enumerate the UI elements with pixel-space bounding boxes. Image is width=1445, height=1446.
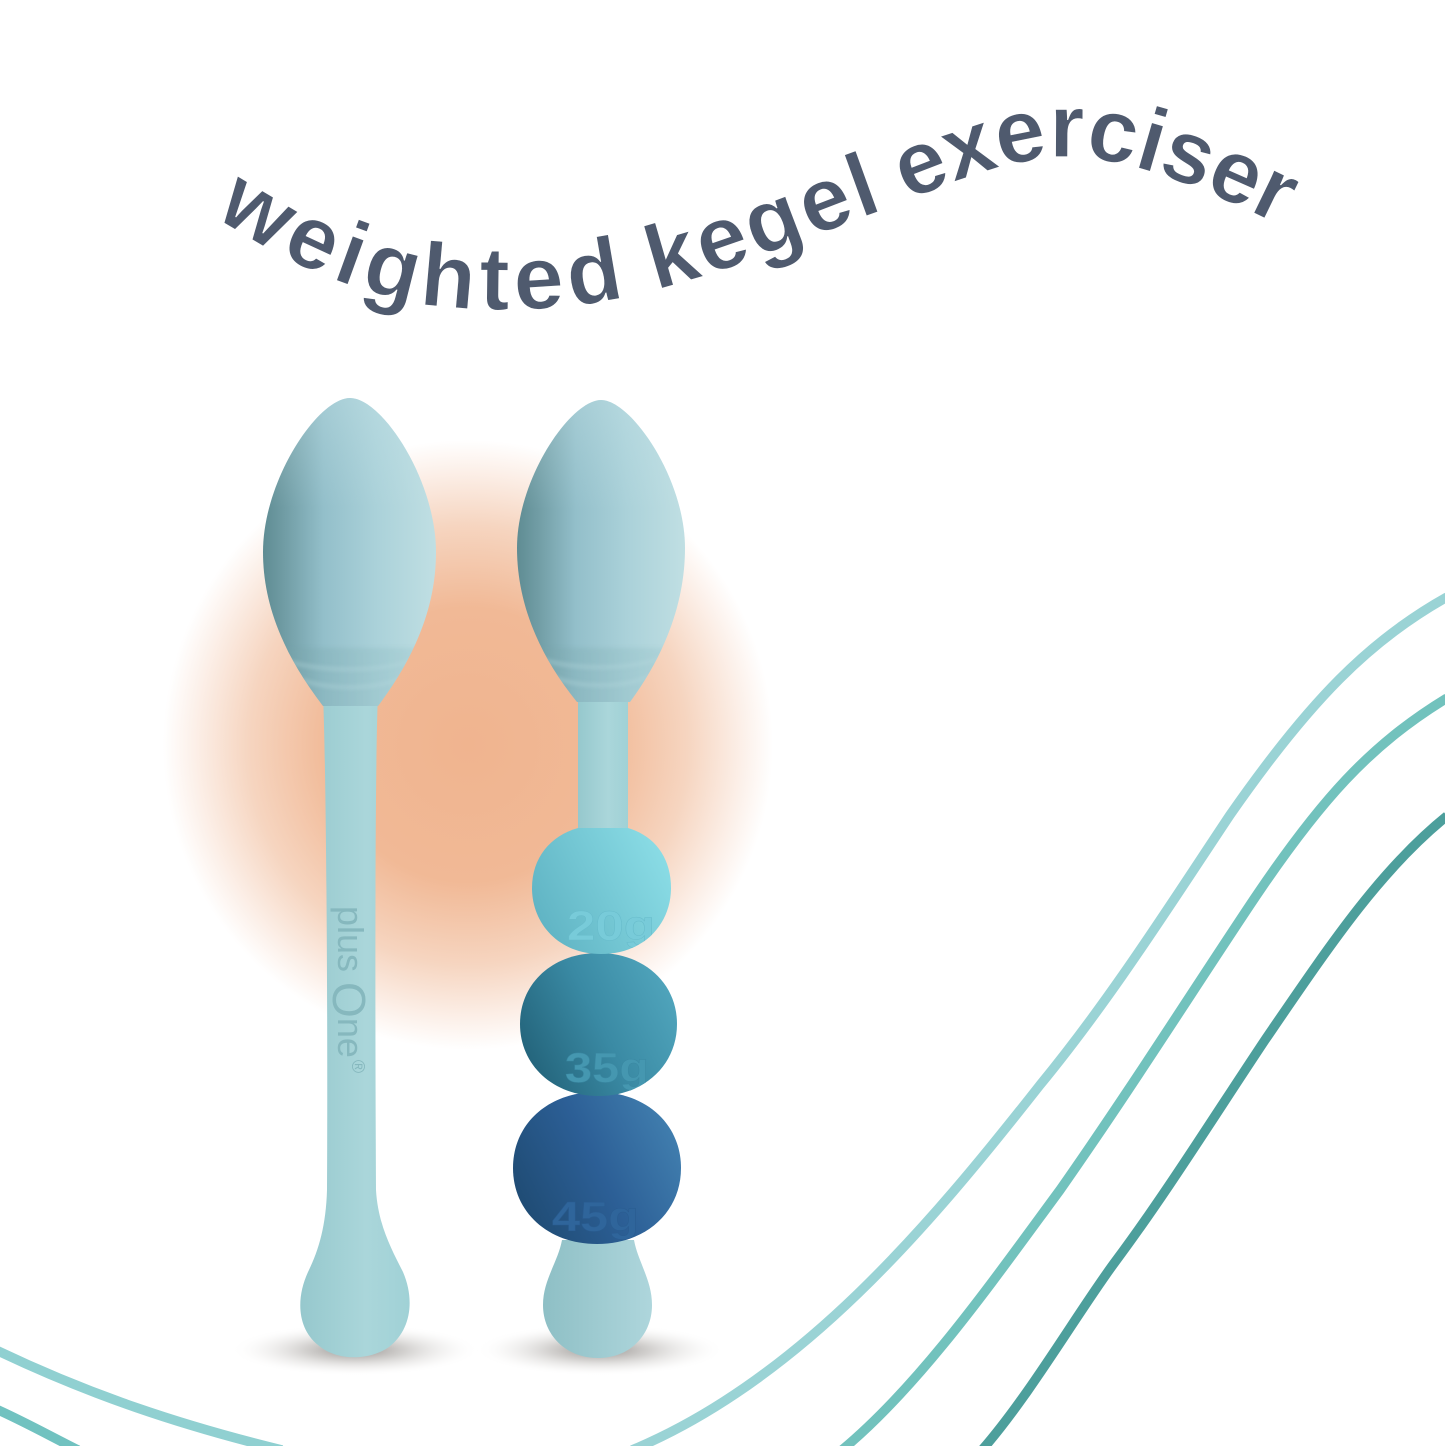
arc: bottom left medium	[0, 1409, 78, 1446]
right wand head	[517, 400, 685, 702]
right head shading and collar ribs	[532, 400, 662, 702]
title: weighted kegel exerciser	[224, 106, 1298, 316]
decorative wave lines right	[0, 597, 1445, 1446]
wand stem and bulb	[300, 695, 410, 1357]
shadow: left wand	[230, 1324, 480, 1376]
embossed logo: ®	[348, 1060, 368, 1073]
product: right wand with weights	[513, 400, 687, 1358]
embossed logo: O	[323, 982, 375, 1018]
weight: 35g: 35g	[565, 1044, 649, 1091]
arc: bottom left light	[0, 1350, 282, 1446]
product: left wand	[263, 398, 438, 1357]
weight: 20g	[532, 828, 671, 954]
wave: medium teal	[842, 698, 1445, 1446]
embossed logo: plus	[330, 906, 371, 972]
weight: 45g	[513, 1092, 681, 1244]
weight: 20g: 20g	[567, 902, 655, 949]
shadow: right wand	[475, 1324, 725, 1376]
right wand stem	[578, 695, 628, 835]
embossed logo: ne	[330, 1018, 371, 1058]
weight: 35g	[520, 953, 677, 1096]
wand head	[263, 398, 436, 706]
right wand bulb	[543, 1240, 652, 1358]
wave: light teal	[632, 597, 1445, 1446]
head shading and collar ribs	[280, 398, 413, 706]
background peach glow	[150, 435, 780, 1055]
wave: dark teal	[982, 816, 1445, 1446]
weight: 45g: 45g	[552, 1193, 639, 1240]
